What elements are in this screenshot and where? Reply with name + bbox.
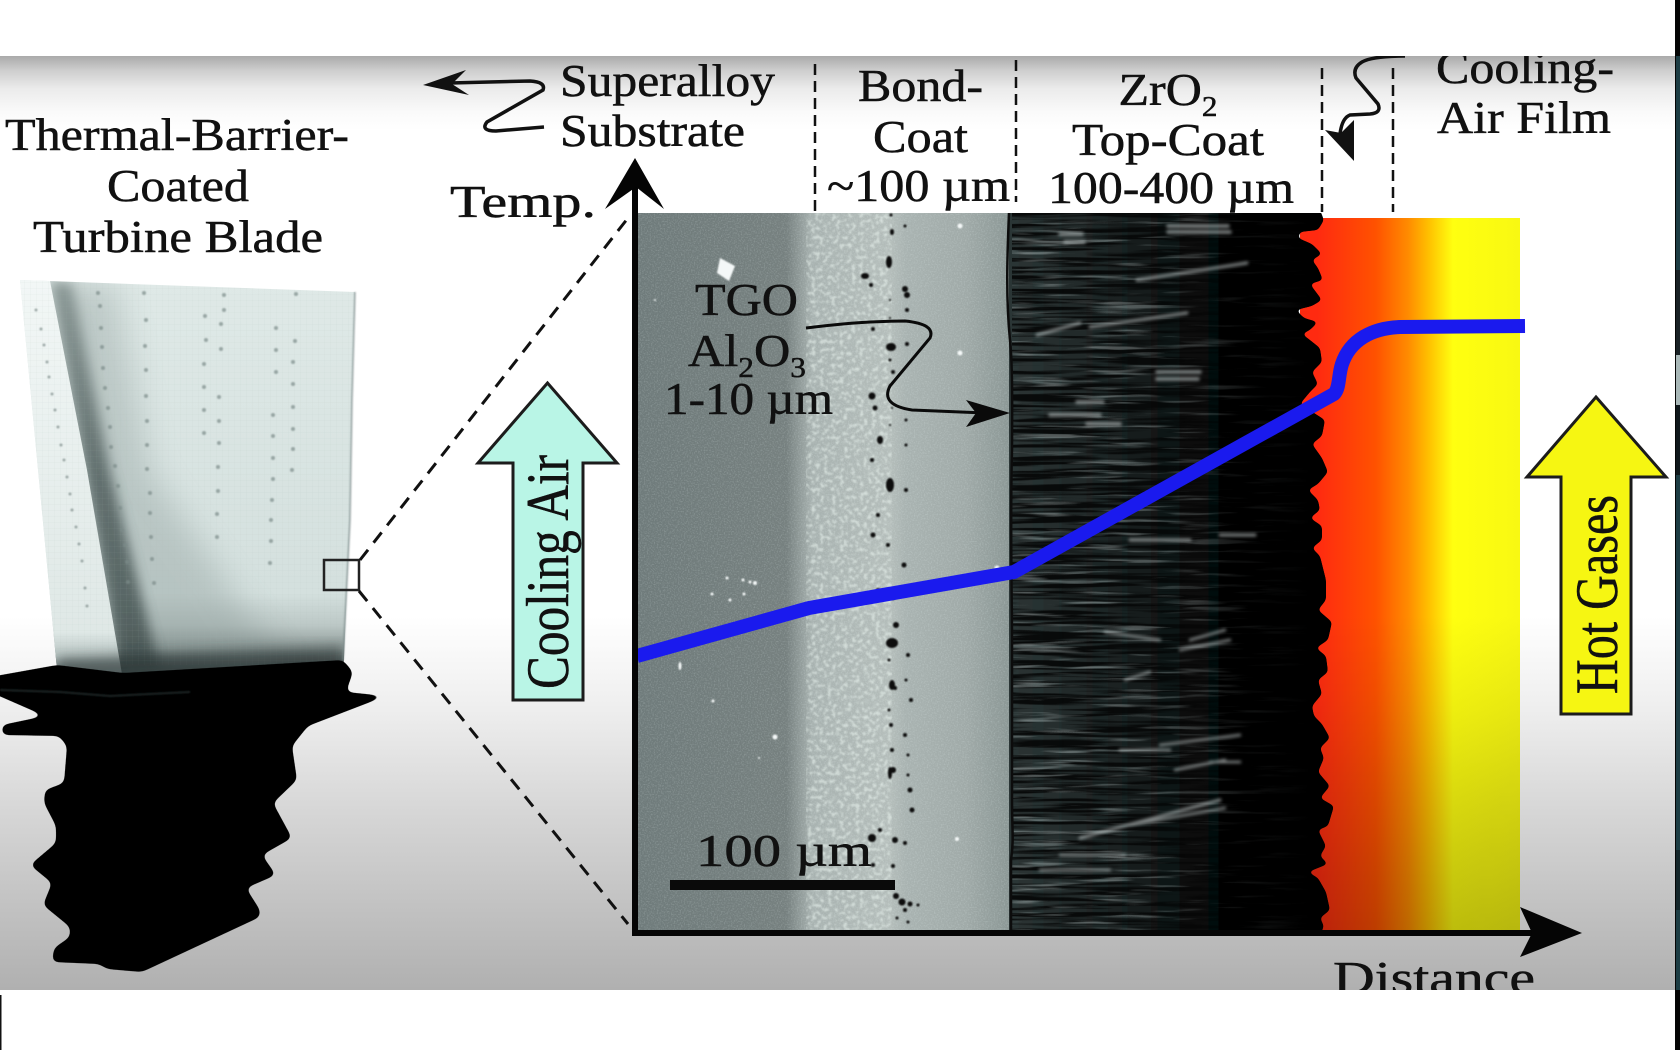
- heading: blade title: Turbine Blade: [33, 212, 323, 262]
- label: cooling air film: Air Film: [1437, 93, 1611, 143]
- label: TGO: TGO: [695, 275, 798, 325]
- label: distance axis: Distance: [1333, 953, 1535, 1003]
- label: TGO: Al: [688, 326, 738, 376]
- arrow: cooling air: [478, 383, 617, 700]
- y axis: temperature: [605, 158, 664, 935]
- bottom left edge line: [0, 995, 2, 1050]
- blade base shadow: [57, 646, 343, 678]
- label: superalloy substrate: [560, 56, 776, 156]
- arrow: superalloy pointer: [423, 70, 544, 131]
- blade airfoil: [20, 280, 355, 680]
- hot gases label: Hot Gases: [1564, 495, 1630, 694]
- flame gradient panel: [1300, 218, 1520, 930]
- fold shadow: [50, 281, 264, 672]
- top coat streaks: [1012, 213, 1280, 930]
- label: superalloy substrate: Superalloy: [560, 56, 776, 106]
- label: superalloy substrate: Substrate: [560, 106, 745, 156]
- pores along bond coat: [861, 214, 920, 924]
- label: TGO: 1-10 µm: [664, 374, 833, 424]
- TGO interface line: [1007, 213, 1013, 930]
- bottom letterbox: [0, 990, 1675, 1050]
- blade root silhouette: [0, 660, 386, 972]
- label: TGO: 2: [738, 353, 754, 384]
- label: temperature axis: Temp.: [450, 177, 596, 227]
- y axis arrowhead: [605, 158, 664, 209]
- leading edge strip: [20, 280, 123, 680]
- zirconia top coat columns: [1000, 200, 1334, 945]
- label: scale bar: 100 µm: [696, 826, 872, 876]
- bright inclusions: [654, 224, 1000, 841]
- arrow: cooling air film pointer: [1325, 56, 1405, 161]
- label: zirconia top coat: 100-400 µm: [1048, 163, 1294, 213]
- heading: blade title: [5, 110, 349, 262]
- label: TGO: O: [754, 326, 790, 376]
- chart: temperature profile curve: [637, 326, 1525, 656]
- dashed zoom lines: [359, 218, 628, 924]
- micrograph grain: [637, 213, 1010, 930]
- panel: micrograph cross-section: [637, 200, 1520, 945]
- arrow: TGO pointer: [806, 321, 1010, 427]
- label: bond coat: [827, 61, 1010, 211]
- bright column highlights: [1037, 226, 1255, 870]
- heading: blade title: Thermal-Barrier-: [5, 110, 349, 160]
- layer boundary dashes: [815, 60, 1393, 212]
- label: cooling air film: Cooling-: [1436, 43, 1614, 93]
- heading: blade title: Coated: [107, 161, 249, 211]
- cooling holes: [34, 291, 298, 608]
- scale bar: [670, 880, 895, 890]
- label: bond coat: Coat: [873, 112, 969, 162]
- arrow: hot gases: [1527, 397, 1666, 714]
- panel: turbine blade photo: [0, 280, 386, 972]
- x axis arrowhead: [1520, 907, 1582, 957]
- label: TGO: 3: [790, 353, 806, 384]
- flame vignette: [1300, 218, 1520, 930]
- label: zirconia top coat: 2: [1202, 92, 1217, 123]
- label: bond coat: ~100 µm: [827, 161, 1010, 211]
- label: cooling air film: [1436, 43, 1614, 143]
- label: zirconia top coat: [1048, 66, 1294, 213]
- callout: zoom square on blade: [324, 560, 359, 590]
- x axis: distance: [632, 907, 1582, 957]
- cooling air label: Cooling Air: [515, 455, 581, 689]
- label: TGO: [664, 275, 833, 424]
- top letterbox: [0, 0, 1675, 56]
- bond coat speckle: [806, 213, 892, 930]
- blade right edge shade: [343, 292, 355, 660]
- right edge strip: [1675, 0, 1680, 1050]
- label: zirconia top coat: ZrO: [1118, 66, 1202, 115]
- label: bond coat: Bond-: [858, 61, 983, 111]
- platform line: [0, 690, 190, 696]
- superalloy and bond coat layers: [637, 213, 1010, 930]
- label: zirconia top coat: Top-Coat: [1072, 115, 1265, 165]
